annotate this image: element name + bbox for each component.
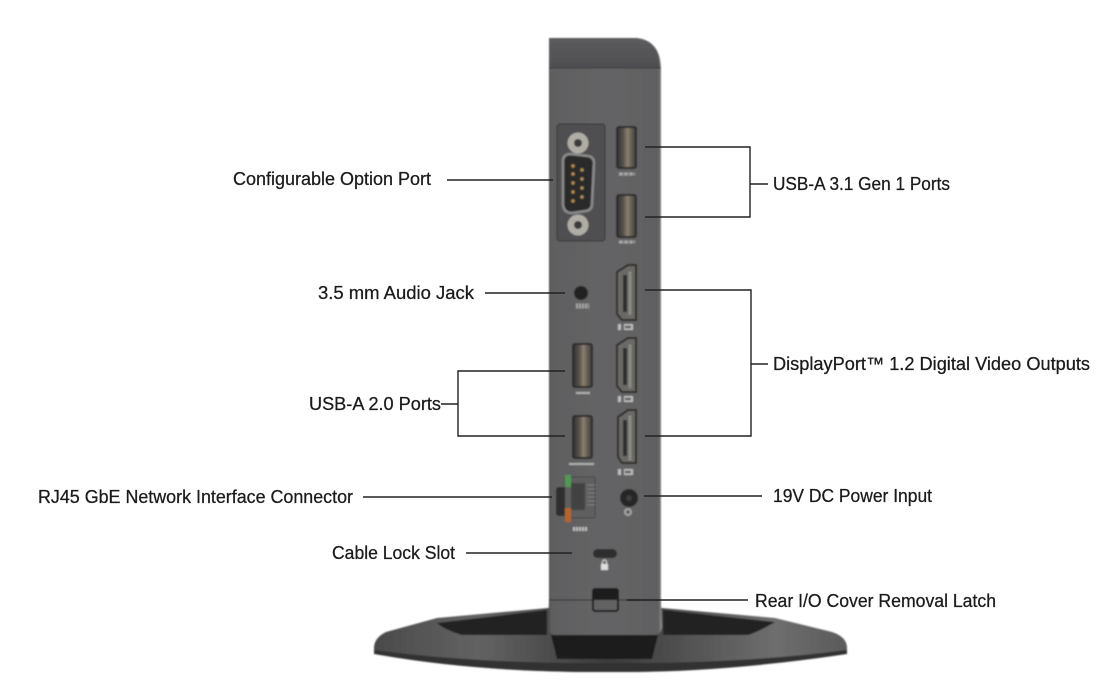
stand base [374, 608, 847, 672]
leader: USB-A 2.0 ports: USB-A 2.0 Ports [309, 394, 441, 414]
leader: power input: 19V DC Power Input [773, 486, 932, 506]
USB 3.1 ports [617, 127, 636, 242]
USB 2.0 ports [569, 344, 594, 464]
device illustration [374, 38, 847, 672]
leader: RJ45: RJ45 GbE Network Interface Connector [38, 487, 353, 507]
audio jack [574, 286, 589, 306]
device body [548, 38, 662, 635]
leader: audio jack: 3.5 mm Audio Jack [318, 283, 475, 303]
RJ45 connector [556, 475, 595, 529]
top cap [549, 38, 660, 68]
leader: configurable option port: Configurable Option Port [233, 169, 431, 189]
cable lock slot [593, 549, 617, 570]
leader: cable lock slot: Cable Lock Slot [332, 543, 455, 563]
serial option port [557, 124, 605, 241]
DisplayPort outputs [617, 265, 636, 472]
leader: DisplayPort outputs: DisplayPort™ 1.2 Digital Video Outputs [773, 354, 1090, 374]
leader: DisplayPort outputs [645, 290, 1090, 436]
leader: USB-A 2.0 ports [309, 371, 565, 436]
cover removal latch [593, 589, 618, 611]
leader: cover latch: Rear I/O Cover Removal Latch [755, 591, 996, 611]
leader: USB-A 3.1 ports: USB-A 3.1 Gen 1 Ports [773, 174, 950, 194]
power input [620, 489, 638, 515]
leader: USB-A 3.1 ports [645, 147, 950, 217]
